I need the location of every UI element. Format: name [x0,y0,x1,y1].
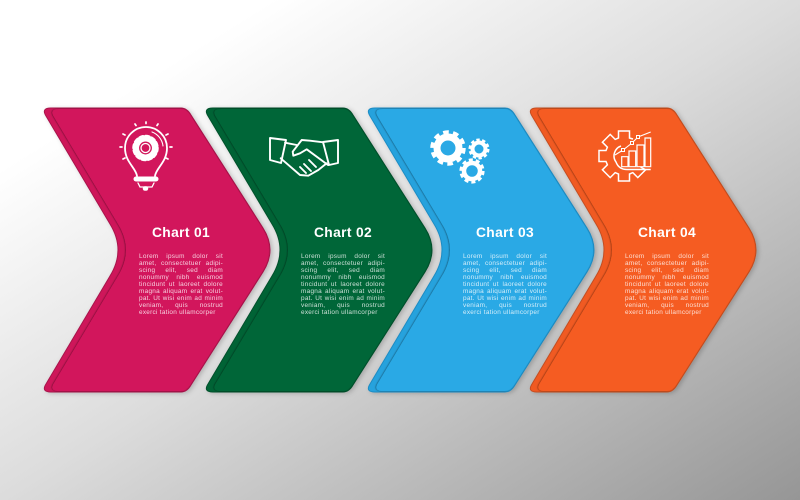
text block: chart 01: nonummy nibh euismod [139,274,223,281]
text block: chart 03: Lorem ipsum dolor sit [463,253,547,260]
chart 02 arrow [206,108,432,392]
text block: chart 02 [301,253,385,316]
text block: chart 03: amet, consectetuer adipi- [463,260,547,267]
text block: chart 02: tincidunt ut laoreet dolore [301,281,385,288]
icon: light bulb with gear [120,122,172,188]
text block: chart 02: amet, consectetuer adipi- [301,260,385,267]
text block: chart 01: pat. Ut wisi enim ad minim [139,295,223,302]
text block: chart 04 [625,253,709,316]
text block: chart 04: pat. Ut wisi enim ad minim [625,295,709,302]
text block: chart 01: Lorem ipsum dolor sit [139,253,223,260]
text block: chart 04: amet, consectetuer adipi- [625,260,709,267]
heading: Chart 02: Chart 02 [314,225,372,240]
text block: chart 03: tincidunt ut laoreet dolore [463,281,547,288]
text block: chart 04: tincidunt ut laoreet dolore [625,281,709,288]
text block: chart 02: exerci tation ullamcorper [301,309,378,316]
icon: gears [432,132,488,182]
text block: chart 04: veniam, quis nostrud [625,302,709,309]
heading: Chart 03: Chart 03 [476,225,534,240]
chart 04 arrow [530,108,756,392]
icon: gear with rising bar chart [599,131,651,181]
heading: Chart 01: Chart 01 [152,225,210,240]
text block: chart 01: magna aliquam erat volut- [139,288,223,295]
text block: chart 04: magna aliquam erat volut- [625,288,709,295]
text block: chart 01: amet, consectetuer adipi- [139,260,223,267]
text block: chart 02: Lorem ipsum dolor sit [301,253,385,260]
text block: chart 01: veniam, quis nostrud [139,302,223,309]
text block: chart 03: nonummy nibh euismod [463,274,547,281]
text block: chart 02: magna aliquam erat volut- [301,288,385,295]
text block: chart 03: veniam, quis nostrud [463,302,547,309]
text block: chart 03: magna aliquam erat volut- [463,288,547,295]
text block: chart 04: scing elit, sed diam [625,267,709,274]
text block: chart 01: exerci tation ullamcorper [139,309,216,316]
text block: chart 04: Lorem ipsum dolor sit [625,253,709,260]
text block: chart 03: exerci tation ullamcorper [463,309,540,316]
text block: chart 02: nonummy nibh euismod [301,274,385,281]
text block: chart 03 [463,253,547,316]
heading: Chart 04: Chart 04 [638,225,696,240]
text block: chart 01: scing elit, sed diam [139,267,223,274]
chart 01 arrow [44,108,270,392]
text block: chart 02: veniam, quis nostrud [301,302,385,309]
text block: chart 03: scing elit, sed diam [463,267,547,274]
text block: chart 04: exerci tation ullamcorper [625,309,702,316]
text block: chart 02: pat. Ut wisi enim ad minim [301,295,385,302]
icon: handshake [270,138,338,176]
text block: chart 01: tincidunt ut laoreet dolore [139,281,223,288]
text block: chart 03: pat. Ut wisi enim ad minim [463,295,547,302]
chart 03 arrow [368,108,594,392]
text block: chart 04: nonummy nibh euismod [625,274,709,281]
text block: chart 01 [139,253,223,316]
text block: chart 02: scing elit, sed diam [301,267,385,274]
